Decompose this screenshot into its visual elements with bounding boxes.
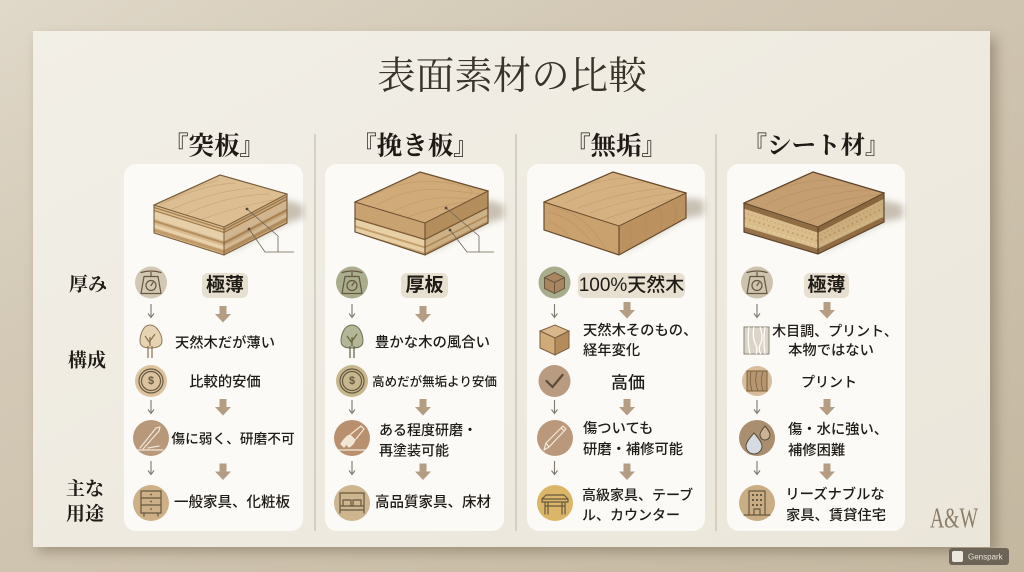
text: durability (583, 419, 683, 458)
block illustration: 無垢 (544, 172, 704, 255)
heading: 突板: 『突板』 (163, 132, 265, 160)
block illustration: 挽き板 (355, 172, 504, 255)
column: 突板 (124, 132, 303, 531)
arrow: small (148, 461, 154, 474)
arrow: small (754, 400, 760, 414)
text: uses: 家具、賃貸住宅 (786, 507, 886, 524)
icon: paint brush (334, 420, 370, 456)
text: uses: ル、カウンター (582, 507, 680, 523)
text: durability (788, 420, 888, 459)
card: 突板 (124, 164, 303, 531)
title: 表面素材の比較 (377, 56, 647, 98)
logo: A&W: A&W (930, 504, 978, 534)
icon: tree (341, 325, 363, 358)
arrow: small (148, 304, 154, 318)
arrow: small (552, 400, 558, 414)
arrow: small (349, 304, 355, 318)
arrow: small (349, 400, 355, 414)
column dividers (315, 134, 716, 531)
text: price: 高めだが無垢より安価 (372, 374, 497, 389)
badge: 極薄: 極薄 (807, 274, 846, 296)
icon: tree (140, 325, 162, 358)
icon: coin: $ (148, 375, 154, 387)
icon: coin (336, 365, 368, 397)
icon: scale (336, 266, 368, 298)
text: structure: 木目調、プリント、 (772, 323, 898, 339)
block illustration: 突板 (154, 175, 303, 255)
text: structure: 天然木だが薄い (175, 334, 275, 352)
heading: 無垢: 『無垢』 (565, 132, 667, 160)
arrow: large (215, 306, 231, 322)
arrow: large (619, 302, 635, 318)
icon: pencil (537, 420, 573, 456)
icon: apartment building (739, 485, 775, 521)
badge: Genspark: Genspark (968, 552, 1004, 562)
icon: wood cube (540, 325, 569, 355)
icon: woodgrain swatch (744, 327, 769, 354)
text: uses (582, 487, 693, 523)
card: シート材 (727, 164, 905, 531)
arrow: small (754, 304, 760, 318)
arrow: large (619, 464, 635, 480)
arrow: small (754, 461, 760, 474)
arrow: large (215, 464, 231, 480)
text: price: 比較的安価 (189, 374, 261, 390)
text: uses: 一般家具、化粧板 (174, 494, 290, 511)
row label: main uses: 主な (66, 478, 104, 500)
arrow: large (415, 306, 431, 322)
row label: main uses: 用途 (66, 502, 105, 524)
icon: scale (135, 266, 167, 298)
arrow: small (349, 461, 355, 474)
arrow: large (415, 399, 431, 416)
text: uses: 高品質家具、床材 (375, 493, 491, 511)
text: durability: 傷・水に強い、 (788, 420, 888, 438)
text: price: プリント (801, 374, 857, 390)
row labels (66, 274, 107, 524)
icon: coin: $ (349, 375, 355, 387)
text: structure (772, 323, 898, 359)
icon: water drops (739, 420, 775, 456)
card: 無垢 (527, 164, 705, 531)
badge: 厚板 (401, 273, 448, 298)
badge: 極薄: 極薄 (206, 274, 244, 296)
text: uses: リーズナブルな (785, 485, 885, 503)
icon: print swatch (742, 366, 772, 396)
column: 挽き板 (325, 132, 504, 531)
badge: 極薄 (202, 273, 248, 298)
text: structure: 豊かな木の風合い (375, 334, 490, 351)
badge: Genspark (949, 548, 1009, 565)
arrow: small (552, 461, 558, 474)
text: uses: 高級家具、テーブ (582, 487, 693, 503)
text: uses (785, 485, 886, 524)
block illustration: シート材 (744, 172, 903, 254)
text: structure (583, 322, 697, 359)
column: シート材 (727, 132, 905, 531)
icon: drawers (133, 485, 169, 521)
icon: scale (741, 266, 773, 298)
row label: thickness: 厚み (69, 274, 107, 296)
arrow: large (415, 464, 431, 480)
icon: scratched surface (133, 420, 169, 456)
arrow: large (215, 399, 231, 416)
heading: シート材: 『シート材』 (742, 132, 890, 160)
icon: table (537, 485, 573, 521)
text: durability: 傷に弱く、研磨不可 (171, 430, 295, 446)
text: durability: 研磨・補修可能 (583, 441, 683, 458)
column: 無垢 (527, 132, 705, 531)
card: 挽き板 (325, 164, 504, 531)
text: structure: 天然木そのもの、 (583, 322, 697, 339)
text: durability: 補修困難 (788, 442, 845, 459)
text: structure: 本物ではない (788, 342, 874, 359)
icon: check mark (538, 365, 570, 397)
text: durability: ある程度研磨・ (379, 422, 477, 438)
text: structure: 経年変化 (583, 342, 640, 359)
badge: 100%天然木: 100%天然木 (579, 273, 684, 296)
icon: bed (334, 485, 370, 521)
badge: 厚板: 厚板 (405, 274, 444, 296)
arrow: large (819, 399, 835, 416)
arrow: small (148, 400, 154, 414)
text: price: 高価 (611, 374, 645, 392)
icon: cube on sage circle (538, 266, 570, 298)
text: durability: 再塗装可能 (379, 442, 449, 458)
arrow: large (619, 399, 635, 416)
icon: coin (135, 365, 167, 397)
arrow: large (819, 464, 835, 480)
row label: composition: 構成 (68, 350, 106, 372)
heading: 挽き板: 『挽き板』 (351, 132, 479, 160)
text: durability (379, 422, 477, 458)
arrow: small (552, 304, 558, 318)
arrow: large (819, 302, 835, 318)
text: durability: 傷ついても (583, 419, 653, 437)
